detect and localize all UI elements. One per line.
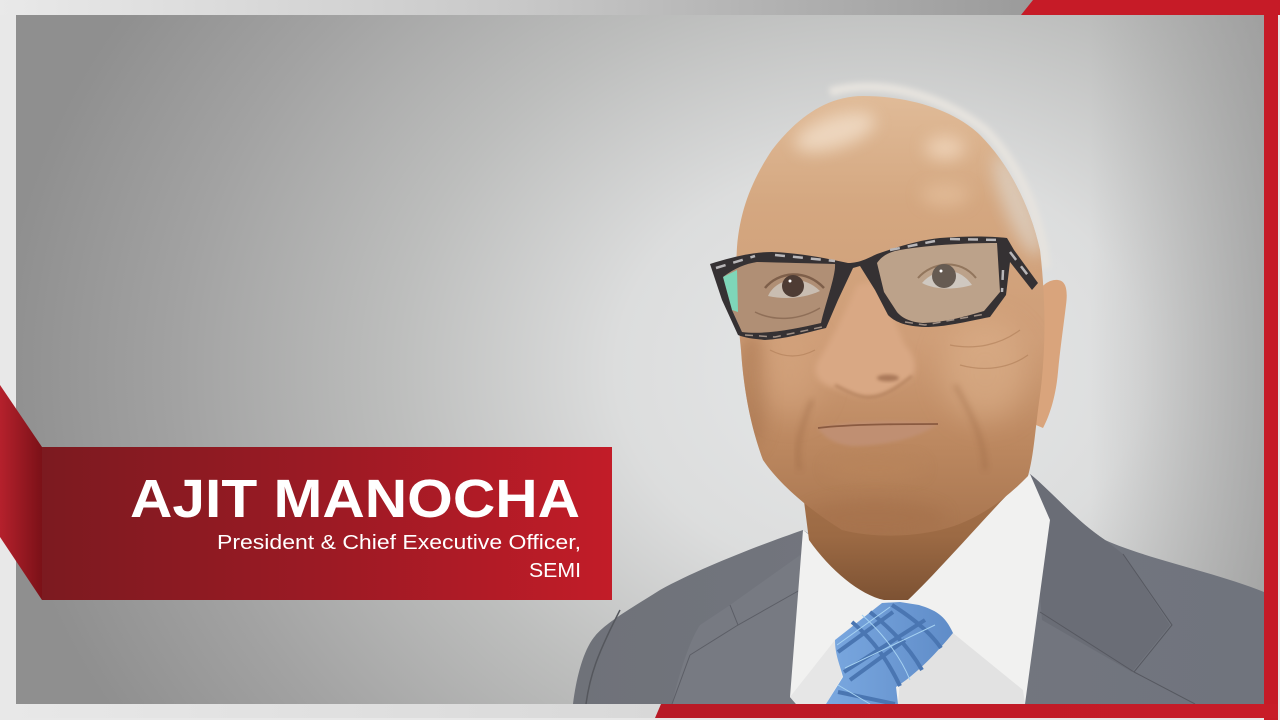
blue striped tie: [826, 602, 953, 704]
cheek and jaw shading: [740, 336, 766, 446]
ear: [1036, 280, 1067, 428]
top frame strip: [0, 0, 1280, 15]
head: [736, 96, 1052, 536]
tortoiseshell glasses: [710, 236, 1038, 340]
suit jacket: [573, 474, 1264, 704]
right lens and eye: [877, 243, 1000, 323]
forehead highlights: [790, 104, 880, 160]
white shirt and collar: [790, 474, 1050, 704]
banner body: [42, 447, 612, 600]
job title: President & Chief Executive Officer,: [217, 532, 581, 554]
banner fold: [0, 385, 42, 600]
mouth: [818, 421, 938, 446]
organisation: SEMI: [529, 560, 581, 582]
nose: [816, 280, 915, 397]
name heading: AJIT MANOCHA: [130, 469, 580, 529]
name banner: [0, 385, 612, 600]
white hair halo: [829, 82, 1040, 230]
neck: [804, 496, 1006, 600]
cheek wrinkles: [770, 330, 1028, 368]
portrait photo: [573, 87, 1264, 704]
left lens and eye: [723, 262, 835, 333]
smile folds: [798, 402, 812, 448]
right red frame strip: [1264, 0, 1278, 720]
bottom frame strip: [0, 704, 1278, 718]
